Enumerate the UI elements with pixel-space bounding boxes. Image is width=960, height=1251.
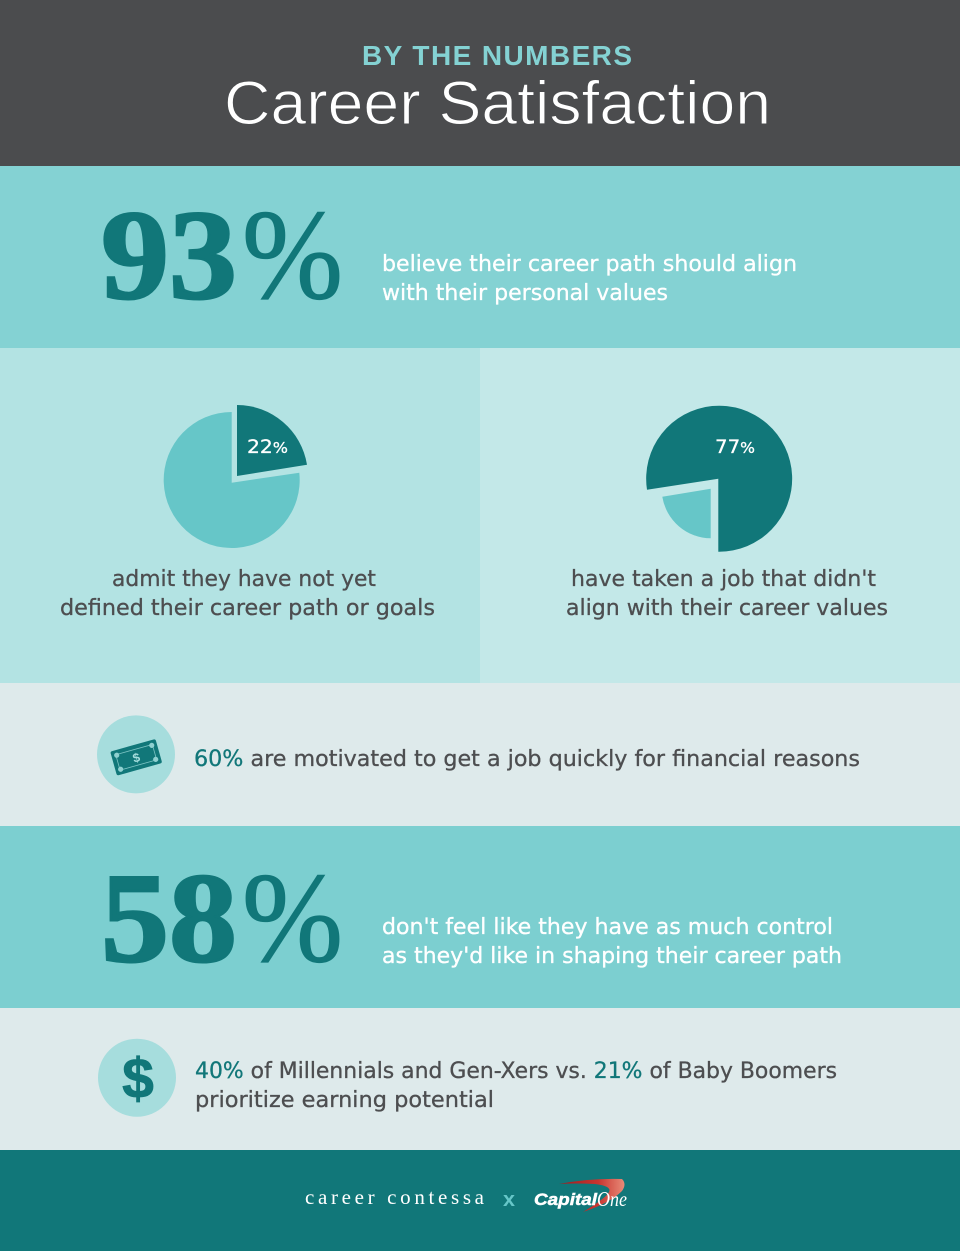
panel: 77 percent	[480, 348, 960, 683]
icon: banknote: $	[131, 750, 142, 766]
caption: job misaligned with values: have taken a job that didn't	[571, 567, 876, 592]
statement: personal values	[382, 252, 797, 306]
panel: 60 percent	[0, 683, 960, 826]
panel: 22 percent	[0, 348, 480, 683]
pie chart 77 percent	[646, 406, 792, 552]
logo: career contessa: career contessa	[305, 1185, 485, 1209]
logo: Capital One: Capital	[534, 1190, 598, 1209]
icon: banknote	[97, 715, 175, 793]
caption: job misaligned with values	[566, 567, 888, 621]
big number 93%	[101, 184, 343, 326]
pie chart 22 percent: 22%	[247, 436, 288, 458]
caption: no career path defined	[60, 567, 435, 621]
statement: personal values: with their personal values	[382, 281, 668, 306]
big number 58%: 58	[101, 847, 237, 989]
eyebrow heading: BY THE NUMBERS	[362, 40, 632, 71]
icon: dollar sign: $	[122, 1047, 154, 1111]
big number 93%: %	[242, 184, 343, 326]
pie chart 77 percent: 77%	[715, 436, 755, 458]
panel: 58 percent	[0, 826, 960, 1008]
big number 58%: %	[242, 847, 343, 989]
caption: no career path defined: admit they have not yet	[112, 567, 376, 592]
statement: earning potential: prioritize earning potential	[195, 1088, 494, 1113]
logo: Capital One	[534, 1179, 627, 1212]
logo: Capital One: One	[597, 1187, 627, 1211]
statement: earning potential	[195, 1059, 837, 1113]
caption: no career path defined: defined their career path or goals	[60, 596, 435, 621]
statement: earning potential: 40% of Millennials and Gen-Xers vs. 21% of Baby Boomers	[195, 1059, 837, 1084]
statement: lack of control: don't feel like they have as much control	[382, 915, 833, 940]
separator x: x	[503, 1189, 515, 1211]
header	[0, 0, 960, 166]
footer	[0, 1150, 960, 1251]
icon: dollar sign	[98, 1039, 176, 1117]
big number 58%	[101, 847, 343, 989]
statement: lack of control: as they'd like in shaping their career path	[382, 944, 842, 969]
title: Career Satisfaction	[224, 69, 771, 137]
panel: 93 percent	[0, 166, 960, 348]
statement: lack of control	[382, 915, 842, 969]
statement: financial reasons: 60% are motivated to get a job quickly for financial reasons	[194, 747, 860, 772]
caption: job misaligned with values: align with their career values	[566, 596, 888, 621]
pie chart 22 percent	[164, 405, 307, 548]
statement: personal values: believe their career path should align	[382, 252, 797, 277]
big number 93%: 93	[101, 184, 237, 326]
panel: 40 percent	[0, 1008, 960, 1150]
